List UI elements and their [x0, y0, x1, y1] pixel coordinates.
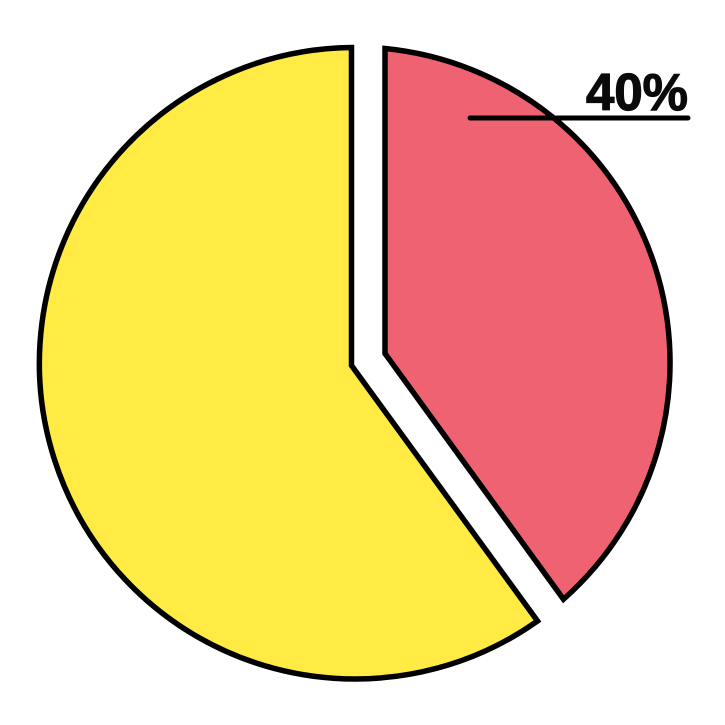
slice: red 40%: [385, 48, 670, 599]
label: 40%: 40%: [586, 64, 688, 122]
slice: yellow 60%: [39, 48, 538, 679]
leader line: [470, 116, 688, 120]
